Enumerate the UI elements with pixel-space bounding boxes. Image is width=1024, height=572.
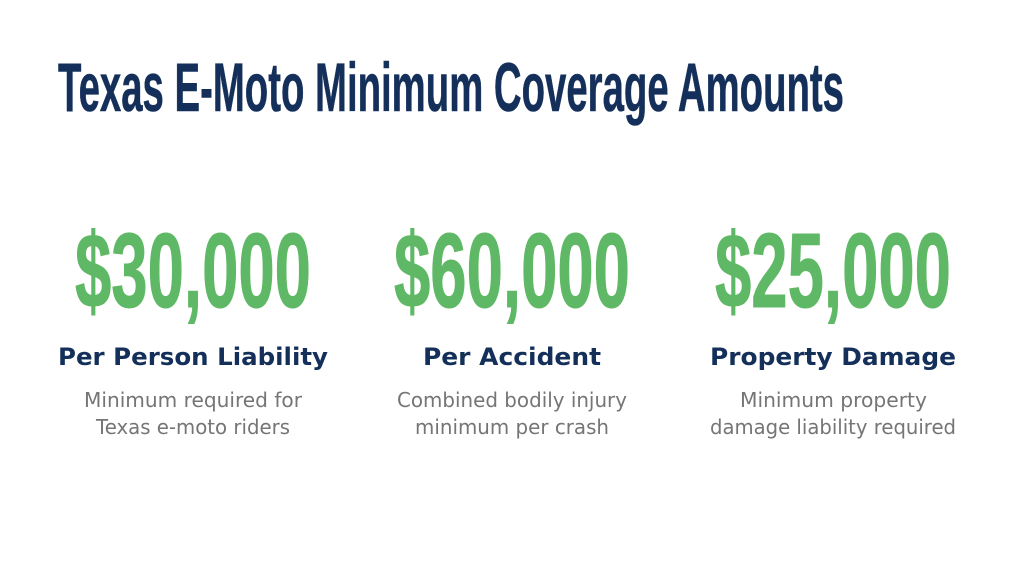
panel: per accident	[394, 212, 630, 439]
description: per person liability: Texas e-moto riders	[95, 415, 290, 439]
description: property damage: damage liability required	[710, 415, 956, 439]
panel: property damage	[710, 212, 956, 439]
panel: per person liability	[58, 212, 328, 439]
description: property damage: Minimum property	[740, 388, 927, 412]
description: per accident: minimum per crash	[415, 415, 609, 439]
heading: property damage: Property Damage	[710, 343, 956, 371]
description: per accident: Combined bodily injury	[397, 388, 627, 412]
description: per person liability: Minimum required for	[84, 388, 303, 412]
description: per accident	[397, 388, 627, 439]
heading: per accident: Per Accident	[423, 343, 601, 371]
heading: per person liability: Per Person Liability	[58, 343, 328, 371]
description: property damage	[710, 388, 956, 439]
amount: $30,000: $30,000	[75, 212, 311, 330]
amount: $60,000: $60,000	[394, 212, 630, 330]
description: per person liability	[84, 388, 303, 439]
